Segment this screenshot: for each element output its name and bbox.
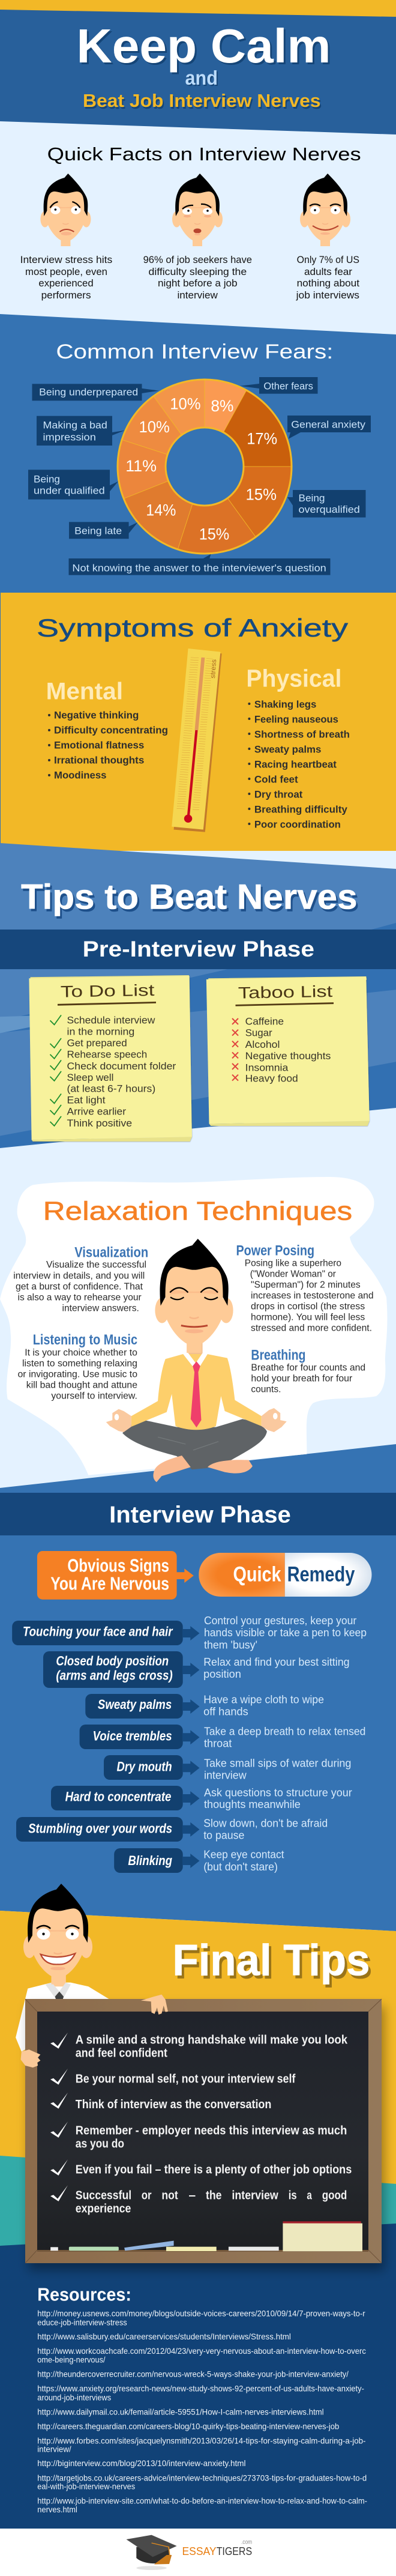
tips text: Think of interview as the conversation [76, 2098, 271, 2111]
row: closed body position: (arms and legs cross) [56, 1667, 173, 1683]
row: sweaty palms: Sweaty palms [98, 1697, 172, 1712]
row: touching face and hair: Control your gestures, keep your [204, 1615, 356, 1627]
heading: taboo list: Taboo List [238, 982, 333, 1002]
to do items: Sleep well [67, 1072, 113, 1083]
panel: quick fact 3 [296, 174, 359, 301]
icon: thermometer: stress [209, 659, 218, 679]
resource links: http://www.forbes.com/sites/jacquelynsmith/2013/03/26/14-tips-for-staying-calm-during-a-job- [37, 2435, 366, 2445]
text block: power posing: ("Wonder Woman" or [250, 1269, 336, 1279]
donut chart: interview fears: 8% [211, 397, 233, 415]
row: voice trembles [80, 1725, 365, 1749]
row: voice trembles: throat [204, 1737, 232, 1749]
text block: power posing: drops in cortisol (the stress [251, 1301, 365, 1311]
panel: physical symptoms: Shaking legs [254, 698, 316, 710]
logo: essaytigers [126, 2535, 252, 2570]
tips text: A smile and a strong handshake will make you look [76, 2033, 348, 2046]
panel: mental symptoms: Mental [46, 678, 123, 704]
resource links: http://www.job-interview-site.com/what-to-do-before-an-interview-how-to-relax-and-how-to-calm- [37, 2496, 367, 2505]
text block: Interview stress hits [20, 254, 112, 265]
panel: mental symptoms: Moodiness [54, 770, 107, 781]
heading band: pre-interview phase: Pre-Interview Phase [83, 937, 314, 961]
callout: being overqualified: Being [299, 492, 325, 504]
callout: being late: Being late [74, 525, 122, 536]
icon: thermometer [172, 649, 222, 832]
tips text: is [289, 2189, 297, 2202]
row: stumbling over words [16, 1817, 328, 1842]
title: and [185, 67, 218, 89]
to do items: in the morning [67, 1026, 134, 1037]
chalkboard [21, 1995, 382, 2263]
donut chart: interview fears: 11% [125, 457, 157, 475]
panel: to do list note [29, 975, 192, 1141]
text block: listening to music: yourself to interview. [51, 1391, 137, 1401]
text block: visualization [13, 1244, 148, 1313]
row: closed body position: Relax and find your best sitting [203, 1656, 349, 1668]
to do items: Schedule interview [67, 1014, 155, 1026]
text block: 96% of job seekers have [143, 254, 252, 265]
icons: chalk check marks [50, 2033, 68, 2201]
text block: listening to music: or invigorating. Use music to [18, 1369, 137, 1379]
text block: power posing: Posing like a superhero [245, 1258, 341, 1268]
panel: physical symptoms: Dry throat [254, 788, 303, 800]
donut chart: interview fears: 10% [170, 395, 201, 413]
row: blinking: (but don't stare) [203, 1861, 278, 1873]
callout: other fears: Other fears [263, 381, 313, 392]
panel: obvious signs header [37, 1551, 194, 1600]
row: closed body position: Closed body position [56, 1653, 169, 1668]
taboo items [245, 1016, 331, 1084]
text block: power posing: Power Posing [236, 1243, 314, 1259]
chalk and eraser [50, 2221, 362, 2251]
row: stumbling over words: Slow down, don't be afraid [203, 1817, 328, 1829]
text block: Only 7% of US [297, 254, 359, 265]
text block: breathing: Breathing [251, 1347, 305, 1363]
text block: performers [41, 289, 91, 301]
row: blinking [114, 1848, 284, 1873]
icons: green checks [50, 1015, 61, 1126]
panel: quick fact 1 [20, 174, 112, 301]
resource links [37, 2308, 367, 2514]
resource links: interview/ [37, 2444, 71, 2454]
panel: physical symptoms: Cold feet [254, 773, 298, 785]
panel: mental symptoms [46, 678, 168, 781]
panel: quick remedy pill: Remedy [287, 1562, 355, 1586]
panel: mental symptoms: Difficulty concentrating [54, 725, 168, 736]
resource links: ome-being-nervous/ [37, 2354, 106, 2364]
panel: physical symptoms: Poor coordination [254, 818, 341, 830]
panel: mental symptoms: Emotional flatness [54, 740, 144, 751]
text block: breathing: Breathe for four counts and [251, 1362, 365, 1373]
panel: physical symptoms [246, 664, 350, 830]
resource links: http://www.workcoachcafe.com/2012/04/23/very-very-nervous-about-an-interview-how-to-overc [37, 2346, 366, 2356]
panel: physical symptoms: Physical [246, 664, 341, 692]
panel: quick fact 2 [143, 174, 252, 301]
heading: to do list: To Do List [61, 981, 155, 1001]
text block: breathing [251, 1347, 365, 1394]
tips text: a [307, 2189, 312, 2202]
callout: other fears [240, 377, 318, 394]
tips text: not [161, 2189, 178, 2202]
row: hard to concentrate: thoughts meanwhile [204, 1798, 301, 1810]
heading: taboo list [235, 982, 334, 1005]
to do items: (at least 6-7 hours) [67, 1083, 155, 1094]
panel: physical symptoms: Shortness of breath [254, 728, 350, 740]
row: hard to concentrate [51, 1786, 352, 1810]
logo: essaytigers: ESSAY [182, 2545, 216, 2557]
row: sweaty palms [85, 1694, 324, 1719]
panel: physical symptoms: Sweaty palms [254, 743, 321, 755]
heading: to do list [58, 981, 156, 1005]
to do items: Rehearse speech [67, 1049, 147, 1060]
row: touching face and hair [12, 1615, 367, 1651]
tips text [76, 2033, 352, 2215]
panel: relaxation techniques background [0, 1177, 387, 1475]
text block: power posing: stressed and more confident. [251, 1323, 372, 1333]
text block: nothing about [297, 277, 359, 289]
resource links: http://targetjobs.co.uk/careers-advice/interview-techniques/273703-tips-for-graduates-how-to-d [37, 2473, 367, 2482]
text block [143, 254, 252, 301]
heading: quick facts: Quick Facts on Interview Nerves [47, 144, 361, 165]
panel: physical symptoms: Feeling nauseous [254, 713, 338, 725]
to do items: Check document folder [67, 1060, 176, 1072]
heading: symptoms of anxiety: Symptoms of Anxiety [37, 614, 348, 642]
tips text: or [142, 2189, 152, 2202]
tips text: Remember - employer needs this interview as much [76, 2124, 347, 2137]
taboo items: Heavy food [245, 1073, 298, 1084]
callout: making a bad impression: Making a bad [43, 419, 107, 431]
donut chart: interview fears [118, 379, 292, 554]
title: Beat Job Interview Nerves [83, 90, 320, 111]
resource links: http://www.dailymail.co.uk/femail/article-59551/How-I-calm-nerves-interviews.html [37, 2407, 324, 2416]
row: stumbling over words: to pause [203, 1829, 244, 1841]
icon: smiling face [300, 174, 350, 246]
to do items: Arrive earlier [67, 1106, 126, 1117]
row: touching face and hair: Touching your face and hair [23, 1624, 173, 1639]
row: hard to concentrate: Hard to concentrate [65, 1789, 171, 1804]
callout: being underprepared [32, 384, 159, 401]
icon: happy face [23, 1884, 92, 1985]
text block: job interviews [296, 289, 359, 301]
title [77, 19, 331, 111]
text block: visualization: interview in details, and you will [13, 1271, 145, 1281]
row: sweaty palms: off hands [203, 1706, 248, 1718]
callout: not knowing the answer: Not knowing the answer to the interviewer's question [72, 563, 326, 574]
text block: adults fear [304, 266, 352, 277]
text block: power posing: hormone). You will feel less [251, 1312, 365, 1322]
row: dry mouth: interview [204, 1770, 247, 1782]
tips text: – [188, 2189, 196, 2202]
to do items: Get prepared [67, 1038, 127, 1049]
hands on board [21, 1995, 168, 2067]
row: closed body position [43, 1651, 349, 1688]
row: touching face and hair: them 'busy' [204, 1639, 257, 1651]
text block: listening to music: It is your choice whether to [25, 1347, 137, 1358]
text block: visualization: Visualization [74, 1244, 148, 1260]
donut chart: interview fears: 14% [146, 501, 176, 519]
text block: interview [178, 289, 218, 301]
callout: not knowing the answer [68, 554, 330, 575]
row: dry mouth: Take small sips of water during [204, 1758, 351, 1770]
text block: experienced [38, 277, 94, 289]
panel: obvious signs header: You Are Nervous [50, 1573, 169, 1594]
resource links: http://theundercoverrecruiter.com/nervous-wreck-5-ways-shake-your-job-interview-anxiety/ [37, 2369, 349, 2378]
callout: general anxiety [287, 416, 371, 439]
icon: graduation cap [126, 2535, 177, 2570]
resource links: nerves.html [37, 2505, 77, 2514]
heading: common interview fears: Common Interview Fears: [56, 340, 333, 363]
row: voice trembles: Voice trembles [92, 1728, 172, 1743]
to do items [67, 1014, 176, 1129]
heading: final tips: Final Tips [173, 1936, 370, 1985]
row: dry mouth [104, 1755, 351, 1782]
heading: tips to beat nerves: Tips to Beat Nerves [21, 877, 358, 916]
row: voice trembles: Take a deep breath to relax tensed [204, 1725, 365, 1737]
tips text: Be your normal self, not your interview self [76, 2072, 296, 2085]
panel: physical symptoms: Breathing difficulty [254, 803, 347, 815]
tips text: interview [232, 2189, 278, 2202]
tips text: as you do [76, 2138, 124, 2151]
callout: being overqualified: overqualified [299, 504, 360, 515]
row: hard to concentrate: Ask questions to structure your [204, 1787, 352, 1799]
resources [37, 2284, 367, 2514]
text block: visualization: interview answers. [62, 1303, 139, 1313]
panel: mental symptoms: Irrational thoughts [54, 755, 144, 766]
row: dry mouth: Dry mouth [116, 1759, 172, 1774]
icon: man behind board [16, 1884, 110, 2052]
row: sweaty palms: Have a wipe cloth to wipe [203, 1694, 324, 1706]
donut chart: interview fears: 10% [139, 418, 170, 436]
callout: being under qualified: Being [34, 473, 60, 485]
donut chart: interview fears: 15% [199, 525, 229, 543]
text block: most people, even [25, 266, 107, 277]
tips text: and feel confident [76, 2046, 167, 2060]
callout: making a bad impression: impression [43, 431, 96, 443]
heading: relaxation techniques: Relaxation Techniques [43, 1197, 352, 1226]
row: blinking: Blinking [128, 1853, 172, 1868]
callout: being overqualified [287, 490, 366, 518]
resource links: eal-with-job-interview-nerves [37, 2481, 135, 2491]
text block [20, 254, 112, 301]
text block: power posing [236, 1243, 374, 1333]
heading band: pre-interview phase [0, 930, 396, 969]
row: closed body position: position [203, 1668, 241, 1680]
text block: listening to music: kill bad thought and attune [26, 1380, 137, 1390]
resource links: http://biginterview.com/blog/2013/10/interview-anxiety.html [37, 2458, 246, 2468]
title: Keep Calm [77, 19, 331, 73]
panel: quick remedy pill [199, 1553, 372, 1597]
text block [296, 254, 359, 301]
row: stumbling over words: Stumbling over your words [28, 1821, 172, 1836]
donut chart: interview fears: 17% [247, 429, 277, 447]
callout: being underprepared: Being underprepared [39, 386, 138, 398]
resource links: http://careers.theguardian.com/careers-blog/10-quirky-tips-beating-interview-nerves-job [37, 2421, 339, 2431]
callout: being late [69, 522, 137, 539]
tips text: Successful [76, 2189, 131, 2202]
to do items: Think positive [67, 1117, 132, 1129]
resource links: https://www.anxiety.org/research-news/new-study-shows-92-percent-of-us-adults-have-anxiety- [37, 2383, 364, 2393]
taboo items: Caffeine [245, 1016, 284, 1027]
text block: night before a job [158, 277, 238, 289]
text block: power posing: increases in testosterone and [251, 1290, 374, 1301]
panel: taboo list note [206, 976, 370, 1126]
text block: listening to music: Listening to Music [33, 1332, 137, 1348]
taboo items: Insomnia [245, 1062, 289, 1073]
to do items: Eat light [67, 1095, 106, 1106]
resource links: http://www.salisbury.edu/careerservices/students/Interviews/Stress.html [37, 2332, 291, 2341]
tips text: Even if you fail – there is a plenty of other job options [76, 2163, 352, 2176]
text block: visualization: get a burst of confidence. That [16, 1281, 143, 1292]
tips text: good [322, 2189, 347, 2202]
resources: Resources: [37, 2284, 131, 2305]
icon: tired face [172, 174, 223, 246]
panel: mental symptoms: Negative thinking [54, 710, 139, 721]
text block: listening to music: listen to something relaxing [22, 1358, 137, 1368]
taboo items: Alcohol [245, 1039, 280, 1050]
taboo items: Sugar [245, 1027, 272, 1039]
icon: calm face [155, 1239, 233, 1353]
icon: meditating man [106, 1239, 287, 1482]
resource links: around-job-interviews [37, 2392, 111, 2402]
donut chart: interview fears: 15% [246, 485, 277, 503]
resource links: educe-job-interview-stress [37, 2317, 127, 2327]
taboo items: Negative thoughts [245, 1050, 331, 1062]
icons: red crosses [232, 1018, 238, 1081]
text block: breathing: counts. [251, 1384, 281, 1394]
row: touching face and hair: hands visible or take a pen to keep [204, 1627, 367, 1639]
row: blinking: Keep eye contact [203, 1849, 284, 1861]
heading band: interview phase: Interview Phase [109, 1502, 291, 1528]
icon: worried face [40, 174, 91, 246]
text block: difficulty sleeping the [149, 266, 247, 277]
heading band: interview phase [0, 1493, 396, 1535]
text block: breathing: hold your breath for four [251, 1373, 353, 1383]
panel: obvious signs header: Obvious Signs [67, 1555, 169, 1576]
callout: general anxiety: General anxiety [291, 419, 366, 431]
callout: being under qualified: under qualified [34, 485, 105, 497]
resource links: http://money.usnews.com/money/blogs/outside-voices-careers/2010/09/14/7-proven-ways-to-r [37, 2308, 365, 2318]
callout: making a bad impression [37, 416, 125, 446]
tips text: experience [76, 2202, 131, 2215]
callout: being under qualified [28, 470, 118, 500]
panel: quick remedy pill: Quick [233, 1562, 281, 1586]
text block: listening to music [18, 1332, 137, 1401]
tips text: the [206, 2189, 222, 2202]
text block: power posing: "Superman") for 2 minutes [251, 1280, 361, 1290]
text block: visualization: is also a way to rehearse your [18, 1292, 142, 1302]
text block: visualization: Visualize the successful [46, 1260, 146, 1270]
panel: physical symptoms: Racing heartbeat [254, 758, 337, 770]
logo: essaytigers: .com [241, 2539, 252, 2546]
logo: essaytigers: TIGERS [217, 2545, 252, 2557]
